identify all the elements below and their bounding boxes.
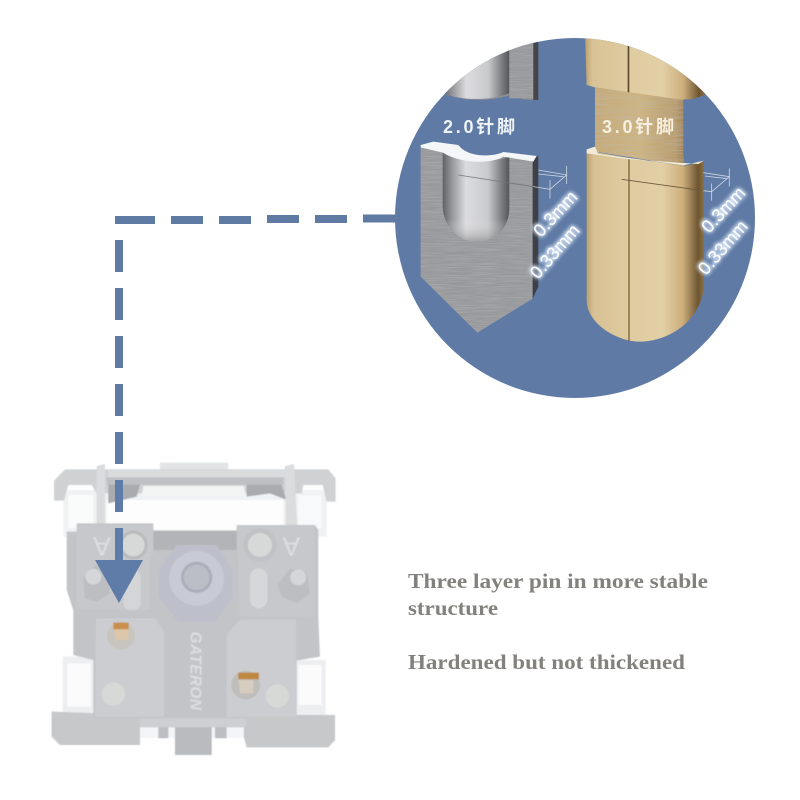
feature: structure continuation: structure [408, 596, 498, 620]
A marks: A [93, 531, 111, 561]
dashed connector line [115, 214, 399, 416]
label: 3.0 pin: 3.0针脚 [602, 117, 674, 137]
centre stem [158, 545, 233, 622]
silver pin dimension text: 0.33mm [526, 220, 584, 283]
gold pin upper part [585, 38, 705, 100]
silver pin upper part [444, 42, 538, 100]
gold pin dimension text [694, 183, 752, 279]
contact plates [95, 618, 296, 717]
dashed connector over switch and arrowhead [95, 432, 143, 603]
lower pegs [102, 682, 289, 708]
silver pin dimension text [526, 187, 584, 283]
text block: features [408, 569, 708, 674]
upper pegs [119, 528, 277, 610]
switch body [52, 523, 335, 755]
clear housing sides [63, 490, 327, 715]
silver 2.0 pin [421, 142, 538, 333]
silver pin dimension text: 0.33mm [526, 220, 584, 283]
top frame [54, 463, 336, 529]
feature: stable structure: Three layer pin in more stable [408, 569, 708, 593]
silver pin dimension text: 0.3mm [529, 187, 581, 241]
dimension lines [458, 166, 729, 201]
gold pin dimension text: 0.3mm [697, 183, 749, 237]
gold pin dimension text: 0.3mm [697, 183, 749, 237]
A marks [93, 531, 300, 561]
gold pin dimension text: 0.33mm [694, 216, 752, 279]
label: 2.0 pin: 2.0针脚 [443, 117, 515, 137]
keyboard switch illustration [52, 463, 336, 755]
gold 3.0 pin [587, 147, 704, 342]
LED guide posts [83, 565, 310, 603]
gold pin dimension text: 0.33mm [694, 216, 752, 279]
circle detail panel: pin comparison [395, 30, 755, 398]
GATERON marking: GATERON [187, 632, 204, 711]
gold pin middle section [595, 87, 685, 166]
silver pin dimension text: 0.3mm [529, 187, 581, 241]
A marks: A [282, 531, 300, 561]
pin holes [107, 622, 260, 699]
feature: hardened: Hardened but not thickened [408, 650, 685, 674]
